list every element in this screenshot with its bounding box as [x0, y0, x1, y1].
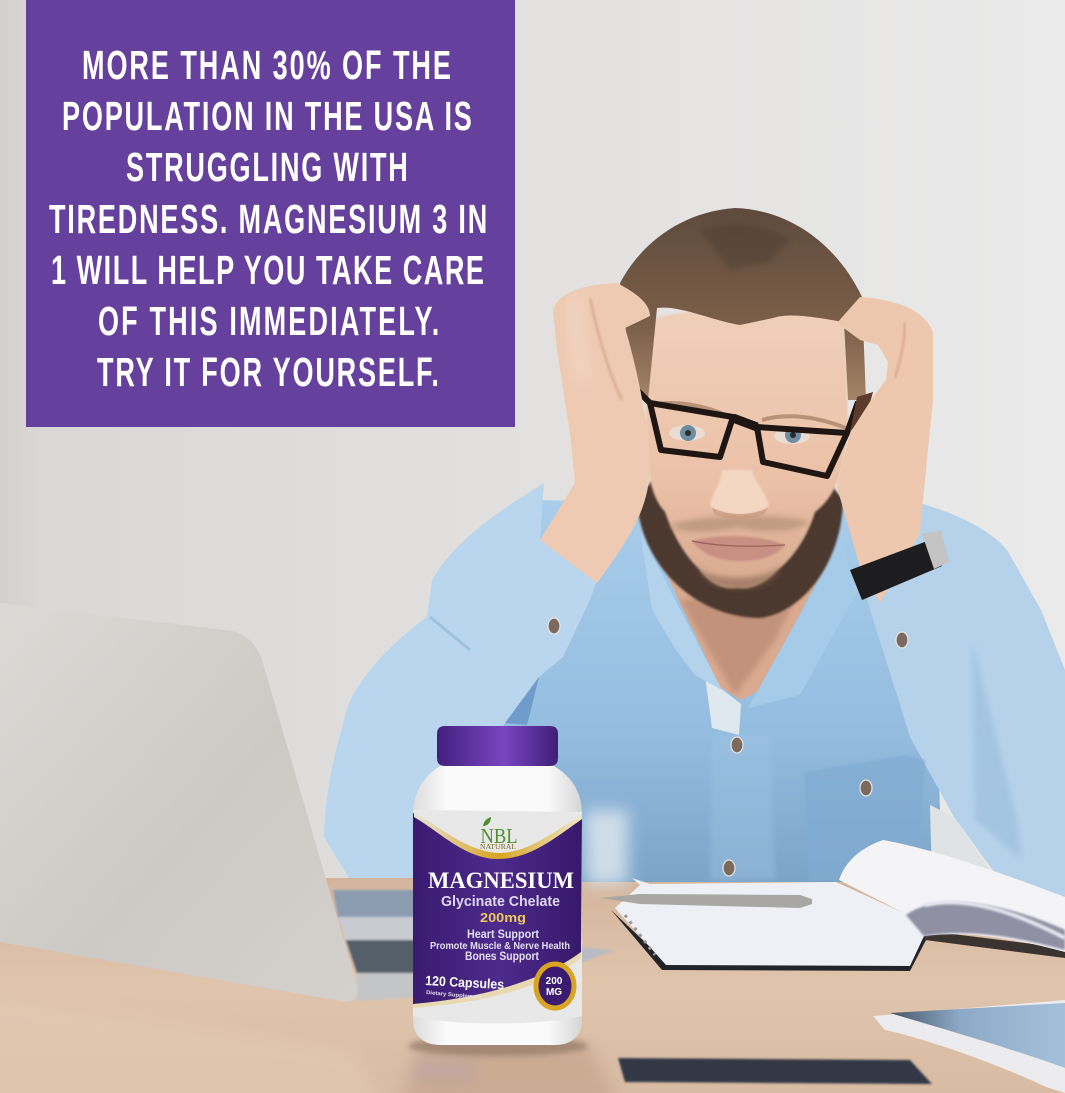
book right pages — [839, 840, 1065, 952]
right arm sleeve — [860, 503, 1065, 900]
wall gap by right arm — [930, 805, 1000, 885]
neck — [660, 553, 832, 700]
panel message — [49, 44, 487, 395]
laptop lid — [0, 603, 358, 1002]
placket — [710, 735, 775, 880]
200 mg badge: 200 — [546, 976, 563, 987]
face — [646, 309, 848, 588]
hand right — [837, 297, 933, 603]
panel message: STRUGGLING WITH — [126, 146, 408, 190]
man — [324, 208, 1065, 900]
product name: MAGNESIUM — [428, 868, 574, 893]
bottle reflection — [410, 1060, 476, 1082]
book cover — [611, 910, 927, 971]
product benefits — [430, 929, 570, 963]
nose — [711, 470, 768, 514]
panel message: MORE THAN 30% OF THE — [82, 44, 451, 88]
panel message: OF THIS IMMEDIATELY. — [98, 300, 439, 344]
head hair — [620, 208, 866, 400]
dosage: 200mg — [480, 910, 526, 925]
dark card on desk — [618, 1058, 932, 1084]
beard — [637, 470, 843, 618]
book — [601, 840, 1065, 971]
brand logo — [480, 817, 518, 851]
blown out shirt patch — [585, 810, 628, 885]
glasses — [632, 385, 858, 476]
capsule count: 120 Capsules — [425, 973, 505, 992]
200 mg badge: MG — [546, 987, 562, 998]
dietary supplement note: Dietary Supplement — [426, 990, 482, 1001]
mouth — [692, 536, 785, 561]
hand left — [540, 283, 650, 583]
watch — [850, 530, 949, 600]
collar — [640, 530, 722, 690]
bottle cap — [437, 726, 558, 766]
panel message: POPULATION IN THE USA IS — [62, 95, 472, 139]
ear shadow — [850, 392, 873, 432]
brand logo: NATURAL — [480, 842, 516, 851]
moustache stubble — [668, 516, 810, 532]
shirt buttons — [548, 618, 908, 876]
pocket — [804, 755, 925, 880]
undershirt — [705, 676, 741, 735]
left sleeve gap — [505, 677, 539, 725]
panel message: TRY IT FOR YOURSELF. — [97, 351, 439, 395]
purple text panel — [26, 0, 515, 427]
product benefits: Bones Support — [465, 951, 539, 963]
desk — [0, 878, 1065, 1093]
gold swoosh — [414, 813, 582, 859]
panel message: TIREDNESS. MAGNESIUM 3 IN — [49, 198, 487, 242]
eyes and brows — [652, 403, 846, 444]
torso — [500, 500, 940, 882]
bottle body — [413, 765, 582, 1045]
panel message: 1 WILL HELP YOU TAKE CARE — [51, 249, 484, 293]
product benefits: Heart Support — [467, 929, 539, 941]
left page — [615, 878, 924, 966]
product benefits: Promote Muscle & Nerve Health — [430, 941, 570, 952]
bottle shadow — [408, 1036, 588, 1056]
brand logo: NBL — [480, 824, 518, 848]
bottle label — [413, 813, 582, 1007]
pen — [601, 894, 812, 908]
200 mg badge — [534, 962, 576, 1010]
product subtitle: Glycinate Chelate — [441, 894, 560, 910]
supplement bottle — [408, 726, 588, 1082]
laptop — [0, 603, 615, 1002]
tablet — [873, 1000, 1065, 1093]
left arm sleeve — [324, 483, 597, 878]
laptop base — [333, 890, 615, 1001]
